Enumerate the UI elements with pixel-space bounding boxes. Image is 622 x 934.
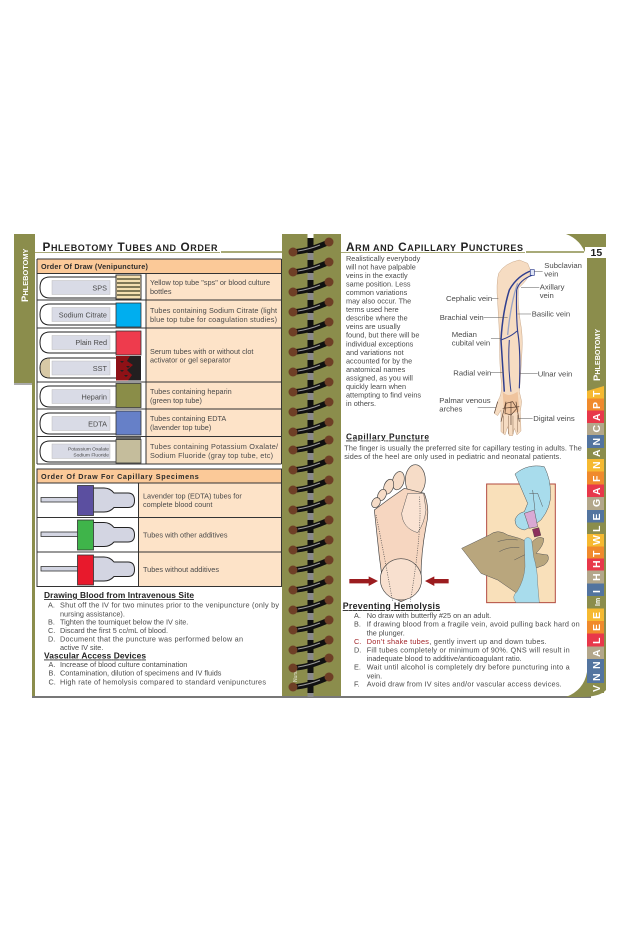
heading: Arm and Capillary Punctures: ARM AND CAPILLARY PUNCTURES <box>346 240 523 254</box>
text: EDTA: (lavender top tube) <box>150 423 211 432</box>
colour index tabs: P <box>591 402 603 409</box>
text block: drawing blood from intravenous site: A. <box>48 601 55 610</box>
gloved supporting hand <box>514 537 539 603</box>
tube: SPS: SPS <box>92 284 107 292</box>
colour index tabs: F <box>591 475 603 482</box>
text block: preventing hemolysis: F. <box>354 680 360 689</box>
illustration: foot with heel puncture zones <box>349 465 449 602</box>
illustration: arm with veins <box>478 260 543 436</box>
colour index tabs: H <box>591 560 603 568</box>
page number: 15 <box>590 247 602 259</box>
text block: preventing hemolysis: Preventing Hemolysis <box>343 601 440 611</box>
text block: vascular access devices: High rate of hemolysis compared to standard venipunctures <box>60 677 266 686</box>
arm silhouette <box>494 260 531 436</box>
colour index tabs: A <box>591 449 603 457</box>
text block: vascular access devices: Increase of blood culture contamination <box>60 660 187 669</box>
text block: drawing blood from intravenous site: nursing assistance). <box>60 609 125 618</box>
arm labels: Brachial vein <box>440 313 484 322</box>
panel: right page <box>341 234 591 698</box>
text: red: Tubes without additives <box>143 565 219 574</box>
colour index tabs: N <box>591 461 603 469</box>
colour index tabs: E <box>591 624 603 631</box>
colour index tabs: C <box>591 424 603 432</box>
tab label: Phlebotomy: PHLEBOTOMY <box>592 329 603 381</box>
arm labels: Median <box>452 330 477 339</box>
spine with spiral binding: Nursing <box>293 665 299 682</box>
colour index tabs: W <box>591 535 603 545</box>
colour index tabs: H <box>591 573 603 581</box>
text: heparin: Tubes containing heparin <box>150 387 232 396</box>
text block: vascular access devices: Vascular Access Devices <box>44 650 146 660</box>
text block: vein intro: may also occur. The <box>346 297 411 306</box>
text block: drawing blood from intravenous site <box>44 590 279 652</box>
colour index tabs: T <box>591 550 603 557</box>
right edge strip with tabs <box>566 234 606 697</box>
colour index tabs: V <box>591 685 603 692</box>
text block: vein intro: in others. <box>346 399 376 408</box>
colour index tabs: N <box>591 673 603 681</box>
text block: drawing blood from intravenous site: C. <box>48 626 55 635</box>
tube: potassium oxalate <box>40 436 141 463</box>
text: lavender: complete blood count <box>143 500 212 509</box>
text block: preventing hemolysis: If drawing blood from a fragile vein, avoid pulling back hard on <box>367 620 580 629</box>
colour index tabs: N <box>591 661 603 669</box>
tube: plain red <box>40 331 141 355</box>
text block: vein intro: common variations <box>346 288 408 297</box>
text: SPS: Yellow top tube "sps" or blood culture <box>150 278 270 287</box>
text block: preventing hemolysis <box>343 601 580 689</box>
spiral-bound book spread <box>14 234 606 698</box>
table: capillary specimens <box>37 469 282 586</box>
illustration: finger stick with gloved hand <box>462 466 555 603</box>
text: serum tubes: activator or gel separator <box>150 356 231 364</box>
text block: vein intro <box>345 254 421 408</box>
text block: preventing hemolysis: Avoid draw from IV sites and/or vascular access devices. <box>367 680 562 689</box>
panel: left page <box>14 234 282 698</box>
text block: preventing hemolysis: Fill tubes completely or minimum of 90%. QNS will result in <box>367 645 570 654</box>
arm labels: Basilic vein <box>532 310 570 319</box>
text block: preventing hemolysis: Wait until alcohol is completely dry before puncturing into a <box>367 663 571 672</box>
capillary tube: lavender <box>41 486 134 516</box>
tube: potassium oxalate: Sodium Fluoride <box>73 452 109 458</box>
text block: drawing blood from intravenous site: active IV site. <box>60 643 103 652</box>
text block: vein intro: individual exceptions <box>346 339 414 348</box>
tube: SPS <box>40 275 141 299</box>
text block: vein intro: accounted for by the <box>346 356 412 365</box>
arm labels: vein <box>544 270 558 278</box>
text block: vascular access devices: C. <box>48 677 56 686</box>
text block: vein intro: veins in the exactly <box>346 271 408 280</box>
arm labels: Axillary <box>540 283 565 292</box>
arm labels: Radial vein <box>453 369 491 378</box>
text block: vein intro: assigned, as you will <box>346 373 413 382</box>
text block: preventing hemolysis: C. <box>354 637 361 646</box>
text block: vascular access devices: Contamination, dilution of specimens and IV fluids <box>60 669 222 678</box>
arm labels: cubital vein <box>452 339 490 348</box>
tube: EDTA <box>40 411 141 435</box>
text block: preventing hemolysis: inadequate blood to additive/anticoagulant ratio. <box>367 654 522 663</box>
arm labels <box>439 261 582 423</box>
text block: vein intro: terms used here <box>346 305 399 314</box>
veins <box>501 270 533 392</box>
arm labels: Digital veins <box>533 414 575 423</box>
colour index tabs: E <box>591 612 603 619</box>
tube: potassium oxalate: Potassium Oxalate <box>68 446 109 452</box>
text: potassium oxalate: Sodium Fluoride (gray top tube, etc) <box>150 451 273 460</box>
text: green: Tubes with other additives <box>143 530 228 540</box>
text block: vein intro: attempting to find veins <box>346 390 421 399</box>
text: sodium citrate: Tubes containing Sodium Citrate (light <box>150 306 277 315</box>
text block: vein intro: found, but there will be <box>346 331 419 340</box>
arm labels: Subclavian <box>544 261 582 270</box>
tube: sodium citrate <box>40 303 141 327</box>
text block: drawing blood from intravenous site: B. <box>48 618 55 627</box>
colour index tabs: T <box>591 390 603 397</box>
text block: vascular access devices <box>44 650 266 686</box>
text block: drawing blood from intravenous site: Shut off the IV for two minutes prior to the venipuncture (only by <box>60 601 279 610</box>
colour index tabs: E <box>591 513 603 520</box>
text: potassium oxalate: Tubes containing Potassium Oxalate/ <box>150 442 279 451</box>
text: serum tubes <box>150 347 253 364</box>
text block: preventing hemolysis: A. <box>354 611 361 620</box>
text block: preventing hemolysis: D. <box>354 645 361 654</box>
arm labels: Cephalic vein <box>446 294 492 303</box>
text: EDTA <box>150 414 226 432</box>
text block: vein intro: veins are usually <box>346 322 401 331</box>
colour index tabs: I <box>591 590 603 593</box>
table: order of draw venipuncture <box>37 259 282 464</box>
tube: heparin <box>40 384 141 408</box>
tube: sodium citrate: Sodium Citrate <box>59 310 107 320</box>
text: heparin: (green top tube) <box>150 396 202 405</box>
tube: plain red: Plain Red <box>75 338 107 347</box>
colour index tabs <box>587 386 604 693</box>
text: EDTA: Tubes containing EDTA <box>150 414 226 423</box>
arm labels: arches <box>439 405 463 414</box>
colour index tabs: A <box>591 487 603 495</box>
tube: EDTA: EDTA <box>88 420 107 428</box>
colour index tabs: A <box>591 649 603 657</box>
leader lines <box>478 272 543 418</box>
tube: heparin: Heparin <box>81 392 107 402</box>
arm labels: Ulnar vein <box>538 369 572 378</box>
colour index tabs: L <box>591 637 603 644</box>
text block: preventing hemolysis: the plunger. <box>367 628 405 637</box>
arm labels: Palmar venous <box>439 396 491 405</box>
table heading: Order Of Draw (Venipuncture) <box>41 262 148 271</box>
text block: vein intro: same position. Less <box>346 280 411 289</box>
text block: vein intro: Realistically everybody <box>346 254 421 263</box>
text block: drawing blood from intravenous site: Discard the first 5 cc/mL of blood. <box>60 626 168 635</box>
colour index tabs: N <box>591 438 603 446</box>
text block: vein intro: quickly learn when <box>346 382 406 391</box>
text block: vein intro: anatomical names <box>346 365 406 374</box>
text block: vein intro: and variations not <box>346 348 404 357</box>
text: sodium citrate <box>150 306 277 324</box>
text: SPS <box>150 278 270 296</box>
tab label: Phlebotomy: PHLEBOTOMY <box>20 249 31 302</box>
colour index tabs: L <box>591 525 603 532</box>
text: serum tubes: Serum tubes with or without clot <box>150 347 253 356</box>
text block: preventing hemolysis: B. <box>354 620 361 629</box>
heading: Phlebotomy Tubes and Order: PHLEBOTOMY TUBES AND ORDER <box>42 240 218 254</box>
arrows pointing to heel <box>349 576 378 586</box>
text block: vein intro: describe where the <box>346 314 408 323</box>
text block: drawing blood from intravenous site: Document that the puncture was performed below an <box>60 635 243 644</box>
capillary tube: red <box>41 555 134 585</box>
text: sodium citrate: blue top tube for coagulation studies) <box>150 315 277 324</box>
text block: preventing hemolysis: Don't shake tubes, gently invert up and down tubes. <box>367 637 547 646</box>
text: SPS: bottles <box>150 287 172 296</box>
text block: drawing blood from intravenous site: D. <box>48 635 55 644</box>
text block: preventing hemolysis: No draw with butterfly #25 on an adult. <box>367 611 491 620</box>
text block: vein intro: will not have palpable <box>345 263 416 272</box>
text: lavender <box>143 492 242 509</box>
spine with spiral binding <box>282 234 341 698</box>
text block: drawing blood from intravenous site: Tighten the tourniquet below the IV site. <box>60 618 188 627</box>
tube: SST <box>40 356 141 380</box>
text block: preventing hemolysis: vein. <box>367 671 382 680</box>
text: heparin <box>150 387 232 405</box>
colour index tabs: A <box>591 413 603 421</box>
text block: preventing hemolysis: E. <box>354 663 361 672</box>
tube: SST: SST <box>93 364 108 373</box>
colour index tabs: G <box>591 499 603 507</box>
text: potassium oxalate <box>150 442 279 460</box>
text block: capillary puncture: Capillary Puncture <box>346 432 429 442</box>
patient hand <box>462 532 548 593</box>
table heading: Order Of Draw For Capillary Specimens <box>41 472 199 481</box>
colour index tabs: Im <box>595 598 602 606</box>
text block: vascular access devices: A. <box>48 660 55 669</box>
text block: capillary puncture: The finger is usually the preferred site for capillary testing in adults. The <box>344 443 582 452</box>
gloved hand holding lancet <box>515 466 550 530</box>
capillary tube: green <box>41 520 134 550</box>
text block: capillary puncture <box>344 432 582 461</box>
text block: drawing blood from intravenous site: Drawing Blood from Intravenous Site <box>44 590 194 600</box>
text: lavender: Lavender top (EDTA) tubes for <box>143 492 242 500</box>
text block: capillary puncture: sides of the heel are only used in pediatric and neonatal patients. <box>344 452 561 461</box>
text block: vascular access devices: B. <box>48 669 55 678</box>
arm labels: vein <box>540 291 554 300</box>
